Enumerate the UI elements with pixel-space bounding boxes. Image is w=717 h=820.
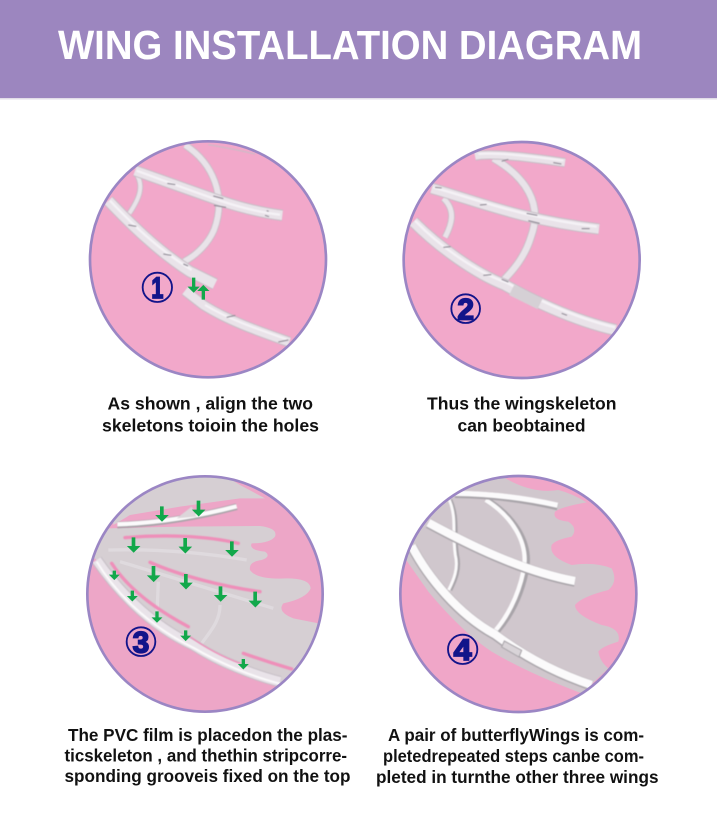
caption: step 3: sponding grooveis fixed on the top xyxy=(64,766,351,786)
panel: step 2 illustration xyxy=(404,142,640,378)
badge: number 3: 3 xyxy=(133,626,149,659)
badge: number 4 xyxy=(448,634,477,667)
panel: step 3 illustration xyxy=(83,468,323,712)
caption: step 4: pletedrepeated steps canbe com- xyxy=(383,746,644,766)
badge: number 3 xyxy=(127,626,155,659)
PVC film xyxy=(94,478,318,683)
pink background disc xyxy=(404,142,640,378)
panel: step 4 illustration xyxy=(395,472,636,712)
pink background disc xyxy=(87,476,323,712)
green arrows: press strips xyxy=(110,501,261,669)
title banner xyxy=(0,0,717,100)
caption: step 4: A pair of butterflyWings is com- xyxy=(388,725,644,745)
caption: step 2 xyxy=(427,394,616,436)
wing skeleton, lower part xyxy=(185,291,289,342)
wing skeleton under film xyxy=(97,506,280,684)
arrows: align holes xyxy=(188,278,209,299)
pink background disc xyxy=(400,476,636,712)
caption: step 2: can beobtained xyxy=(458,416,586,436)
pink thin strips xyxy=(112,536,292,669)
badge: number 1: 1 xyxy=(151,272,163,305)
badge: number 2 xyxy=(451,293,480,326)
caption: step 1: As shown , align the two xyxy=(108,394,313,414)
caption: step 3: The PVC film is placedon the plas- xyxy=(68,725,348,745)
caption: step 4 xyxy=(376,725,659,787)
caption: step 4: pleted in turnthe other three wings xyxy=(376,767,659,787)
finished wing skeleton xyxy=(412,493,592,686)
panel: step 1 illustration xyxy=(90,141,326,377)
circle border xyxy=(404,142,640,378)
circle border xyxy=(400,476,636,712)
circle border xyxy=(87,476,323,712)
badge: number 2: 2 xyxy=(457,293,474,326)
circle border xyxy=(90,141,326,377)
badge: number 4: 4 xyxy=(454,634,472,667)
wing skeleton, upper part xyxy=(108,145,282,284)
title: WING INSTALLATION DIAGRAM xyxy=(58,22,642,68)
caption: step 3 xyxy=(64,725,351,786)
caption: step 3: ticskeleton , and thethin stripcorre- xyxy=(64,746,347,766)
joined wing skeleton xyxy=(413,154,616,330)
PVC film xyxy=(395,472,619,693)
badge: number 1 xyxy=(143,272,172,305)
caption: step 1 xyxy=(102,394,319,436)
caption: step 1: skeletons toioin the holes xyxy=(102,416,319,436)
pink background disc xyxy=(90,141,326,377)
caption: step 2: Thus the wingskeleton xyxy=(427,394,616,414)
